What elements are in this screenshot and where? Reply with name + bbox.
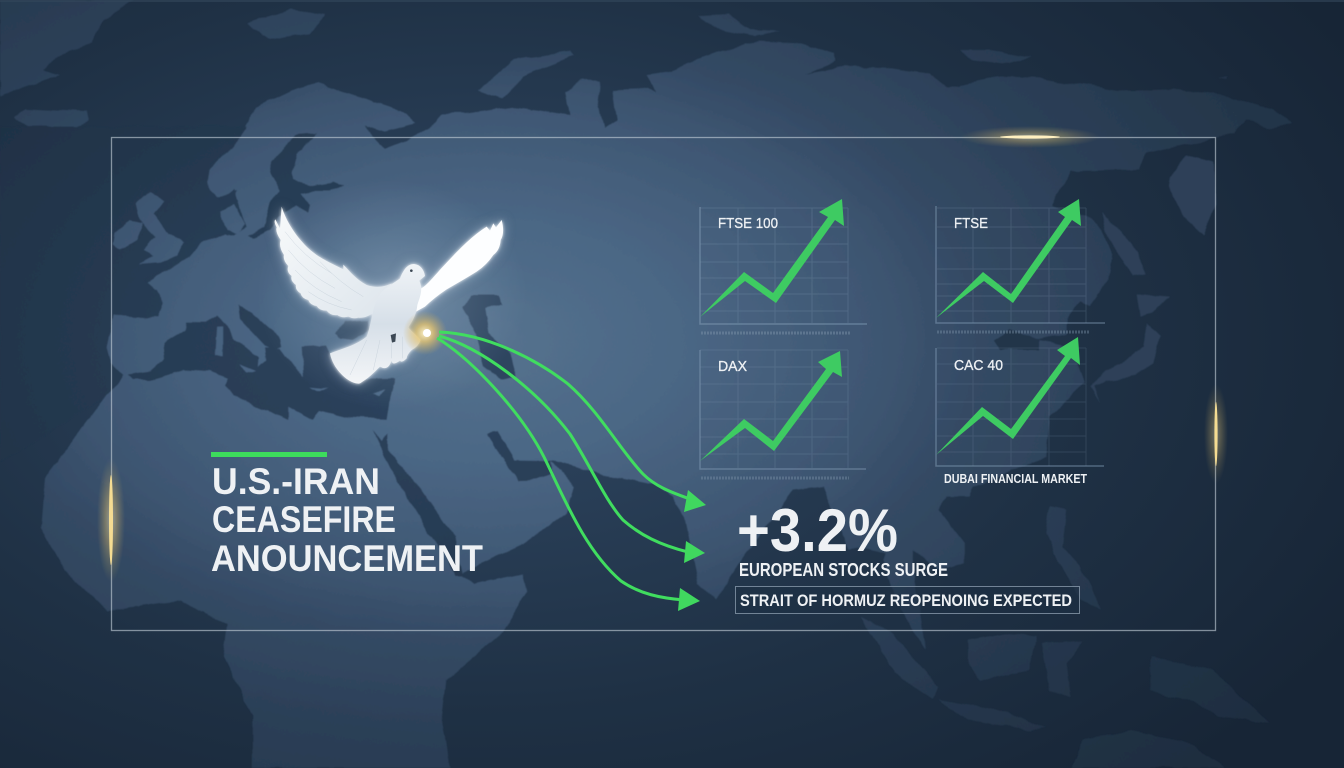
signal origin spark	[403, 311, 447, 355]
headline text: ANOUNCEMENT	[211, 538, 483, 579]
chart: DAX: DAX	[718, 359, 747, 375]
arrow to lower target	[437, 338, 700, 611]
top edge highlight	[0, 0, 1344, 2]
stat value: +3.2%	[737, 497, 898, 564]
Atlantic and North Sea	[0, 127, 247, 463]
dove right wing	[416, 220, 503, 312]
dove body and tail	[330, 264, 425, 384]
callout: Strait of Hormuz	[736, 586, 1080, 614]
frame glint: left	[97, 458, 125, 582]
Sakhalin, Primorye, Korea, Japan	[1090, 157, 1215, 403]
Black Sea	[336, 320, 370, 340]
headline text	[211, 461, 483, 579]
callout: Strait of Hormuz: STRAIT OF HORMUZ REOPENOING EXPECTED	[740, 591, 1072, 610]
north-east Asian coast details	[993, 157, 1215, 403]
headline accent bar	[211, 452, 327, 457]
frame glint: right	[1204, 384, 1228, 484]
stat: +3.2% European stocks surge	[737, 497, 948, 580]
frame glint: top	[960, 126, 1100, 148]
green connection arrows	[437, 332, 706, 611]
stat caption: EUROPEAN STOCKS SURGE	[739, 560, 948, 580]
chart: CAC 40	[936, 337, 1104, 466]
Bohai Sea	[993, 330, 1040, 350]
arrow to upper target	[439, 332, 706, 512]
chart: FTSE	[936, 199, 1105, 332]
dove eye and feet	[391, 269, 413, 343]
label: Dubai Financial Market: DUBAI FINANCIAL MARKET	[944, 472, 1087, 486]
arrow to middle target	[439, 336, 705, 563]
chart: FTSE: FTSE	[954, 216, 988, 232]
British Isles, Denmark and Mediterranean islands	[113, 192, 383, 396]
chart: FTSE 100: FTSE 100	[718, 216, 778, 232]
dove left wing	[275, 207, 392, 318]
arctic and northern islands	[0, 0, 1228, 136]
chart: CAC 40: CAC 40	[954, 358, 1003, 374]
icon: white peace dove	[275, 207, 503, 384]
Baltic	[247, 133, 345, 238]
chart: FTSE 100	[700, 199, 867, 333]
dove feather detail	[285, 232, 403, 375]
Mediterranean and Adriatic	[128, 307, 395, 420]
glow behind dove	[257, 180, 527, 410]
main frame	[112, 138, 1216, 630]
headline text: CEASEFIRE	[212, 499, 396, 540]
headline text: U.S.-IRAN	[212, 461, 380, 502]
seas: Caspian, Red Sea, Persian Gulf	[373, 295, 553, 575]
south-east Asian islands and Australia	[861, 507, 1269, 768]
seas of Europe	[0, 127, 395, 463]
headline block	[211, 452, 483, 579]
chart: DAX	[700, 350, 866, 478]
